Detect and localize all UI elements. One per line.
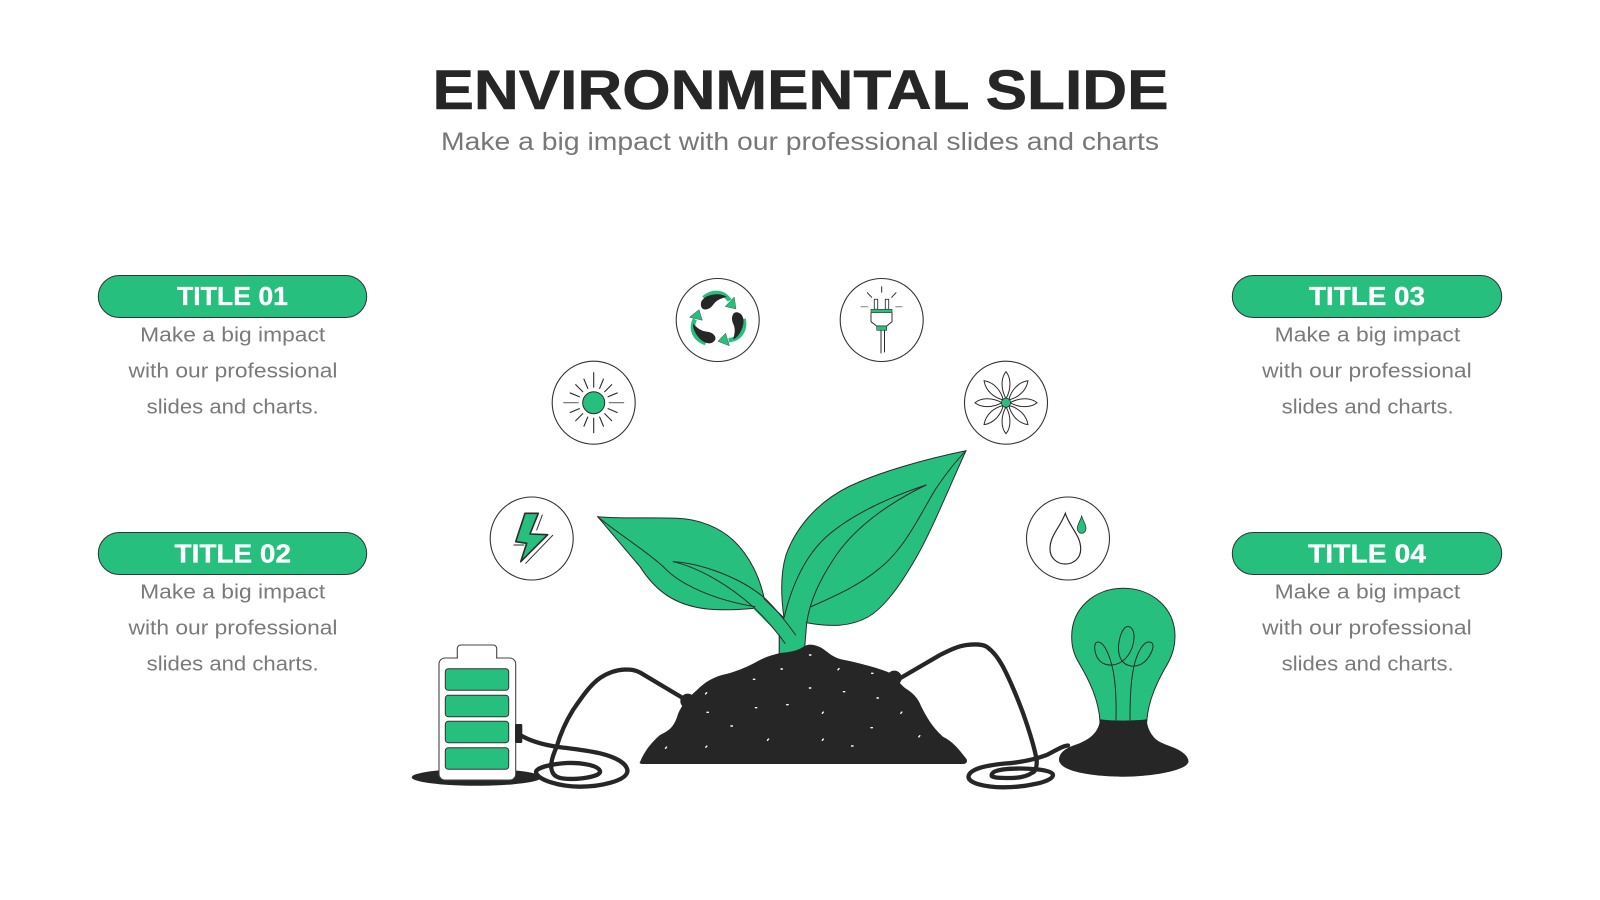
light bulb — [1059, 588, 1188, 777]
soil mound — [640, 645, 967, 764]
pill: title 04 — [1232, 532, 1502, 574]
leaf outlines and veins — [598, 451, 966, 656]
right leaf — [779, 451, 966, 656]
soil specks — [666, 655, 920, 748]
pill: title 03 — [1232, 276, 1502, 318]
right cable — [900, 644, 1068, 787]
battery terminal — [515, 724, 522, 743]
body text 02: with our professional — [127, 616, 337, 640]
icon: recycle — [676, 278, 759, 362]
bulb base — [1059, 719, 1188, 777]
body text 02: Make a big impact — [140, 580, 326, 604]
panel: title 02 — [98, 532, 367, 676]
icon: flower — [964, 361, 1048, 444]
body text 01 — [127, 324, 337, 418]
body text 01: slides and charts. — [147, 396, 319, 418]
body text 04: Make a big impact — [1275, 580, 1461, 604]
battery shadow — [412, 769, 542, 786]
panel: title 01 — [98, 276, 367, 418]
pill label 02: TITLE 02 — [174, 540, 291, 568]
body text 04: with our professional — [1261, 616, 1472, 640]
pill label 03: TITLE 03 — [1309, 283, 1425, 311]
body text 02: slides and charts. — [147, 652, 319, 676]
body text 03 — [1261, 324, 1472, 418]
body text 04 — [1261, 580, 1472, 676]
body text 03: slides and charts. — [1282, 396, 1454, 418]
body text 03: Make a big impact — [1275, 324, 1461, 346]
pill label 04: TITLE 04 — [1308, 540, 1427, 568]
battery — [412, 645, 542, 786]
left cable — [520, 670, 683, 787]
battery cap — [457, 645, 497, 665]
icon: lightning bolt — [490, 497, 573, 580]
title: ENVIRONMENTAL SLIDE — [432, 58, 1168, 121]
body text 01: with our professional — [127, 360, 337, 382]
icon: plug — [840, 278, 923, 362]
icon: water drops — [1026, 497, 1110, 580]
body text 04: slides and charts. — [1282, 652, 1454, 676]
cable plugs — [680, 694, 695, 708]
pill: title 01 — [98, 276, 367, 318]
panel: title 03 — [1232, 276, 1502, 418]
pill: title 02 — [98, 532, 367, 574]
body text 01: Make a big impact — [140, 324, 326, 346]
bulb glass — [1072, 588, 1175, 722]
subtitle: Make a big impact with our professional slides and charts — [441, 128, 1159, 156]
body text 03: with our professional — [1261, 360, 1472, 382]
battery cells — [445, 669, 509, 769]
icon: sun — [552, 361, 635, 444]
plant sprout — [598, 451, 966, 656]
body text 02 — [127, 580, 337, 676]
panel: title 04 — [1232, 532, 1502, 676]
battery body — [439, 658, 516, 780]
bulb filament — [1095, 626, 1153, 720]
left leaf — [598, 517, 804, 656]
pill label 01: TITLE 01 — [177, 283, 288, 311]
